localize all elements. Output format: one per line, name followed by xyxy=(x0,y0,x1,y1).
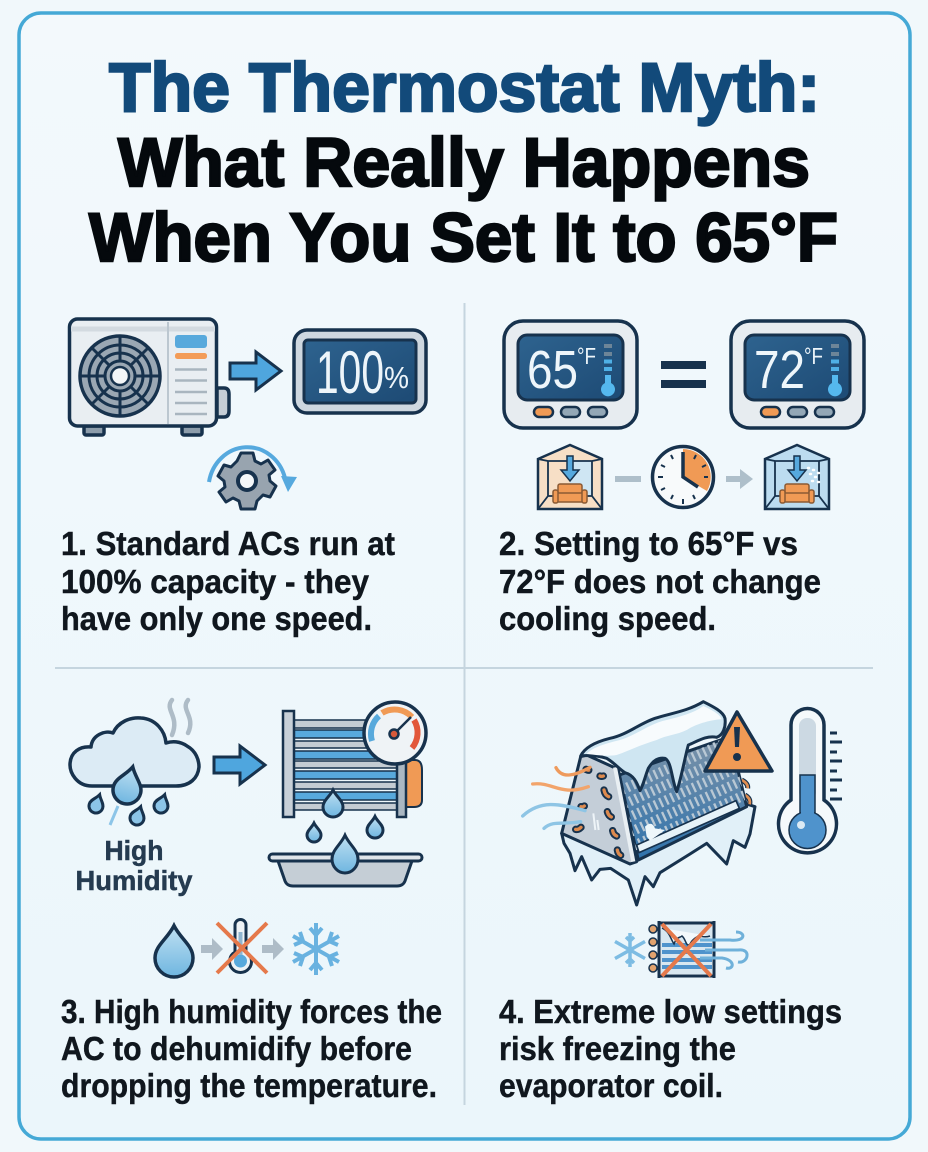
tube ends xyxy=(576,769,621,855)
icon: thermostat 72F xyxy=(731,321,864,428)
arrow xyxy=(214,746,265,784)
text: step 3 xyxy=(61,993,442,1104)
airflow xyxy=(523,767,590,828)
back tube ends xyxy=(742,780,750,804)
icon: 100% display: 100 xyxy=(316,339,384,406)
icon: thermostat 65F xyxy=(504,321,637,428)
icon: snowflake, blocked coil and wind xyxy=(615,921,747,978)
text: step 3: 3. High humidity forces the xyxy=(61,993,442,1030)
icon: 100% display xyxy=(294,330,426,413)
text: step 3: AC to dehumidify before xyxy=(61,1030,412,1067)
fin face xyxy=(619,737,747,860)
icon: thermostat 72F: °F xyxy=(804,343,823,369)
text: step 1: have only one speed. xyxy=(61,600,372,637)
arrow xyxy=(726,469,753,489)
icon: coil with gauge xyxy=(283,702,426,842)
label: high humidity xyxy=(76,835,193,896)
panel: step 2 same cooling speed xyxy=(499,321,864,637)
title: The Thermostat Myth: xyxy=(109,49,820,126)
icon: frozen evaporator coil xyxy=(523,702,755,905)
icon: thermostat 65F: 65 xyxy=(527,340,578,400)
icon: thermostat 72F: 72 xyxy=(754,340,805,400)
icon: drip tray xyxy=(269,835,422,886)
text: step 2 xyxy=(499,525,821,637)
icon: 100% display: % xyxy=(384,360,409,395)
dash xyxy=(615,476,641,482)
text: step 3: dropping the temperature. xyxy=(61,1067,437,1104)
arrow xyxy=(230,352,281,390)
icon: clock xyxy=(652,446,714,508)
title xyxy=(89,49,838,276)
panel: step 1 standard AC xyxy=(61,319,426,637)
icon: gear with rotation arrow xyxy=(209,447,297,509)
panel: step 3 humidity xyxy=(61,700,442,1104)
label: high humidity: Humidity xyxy=(76,865,193,896)
panel: step 4 frozen coil xyxy=(499,702,842,1104)
equals sign xyxy=(661,361,706,388)
icon: outdoor AC unit xyxy=(70,319,229,435)
icon: sequence drop to snowflake xyxy=(155,920,339,977)
text: step 2: cooling speed. xyxy=(499,600,716,637)
text: step 4: evaporator coil. xyxy=(499,1067,723,1104)
icon: cool room xyxy=(765,445,829,509)
ice base with icicles xyxy=(562,804,755,905)
text: step 2: 72°F does not change xyxy=(499,563,821,600)
label: high humidity: High xyxy=(104,835,164,866)
icon: thermometer xyxy=(778,709,842,853)
text: step 1: 1. Standard ACs run at xyxy=(61,525,395,562)
text: step 2: 2. Setting to 65°F vs xyxy=(499,525,798,562)
icon: warning triangle xyxy=(705,712,772,771)
text: step 4: 4. Extreme low settings xyxy=(499,993,842,1030)
title: What Really Happens xyxy=(118,124,810,201)
text: step 4: risk freezing the xyxy=(499,1030,736,1067)
text: step 1 xyxy=(61,525,395,637)
side plate xyxy=(562,755,637,864)
icon: thermostat 65F: °F xyxy=(577,343,596,369)
title: When You Set It to 65°F xyxy=(89,199,838,276)
icon: rain cloud xyxy=(70,700,199,827)
text: step 4 xyxy=(499,993,842,1104)
text: step 1: 100% capacity - they xyxy=(61,563,370,600)
top snow xyxy=(581,702,725,792)
icon: warm room xyxy=(538,445,602,509)
